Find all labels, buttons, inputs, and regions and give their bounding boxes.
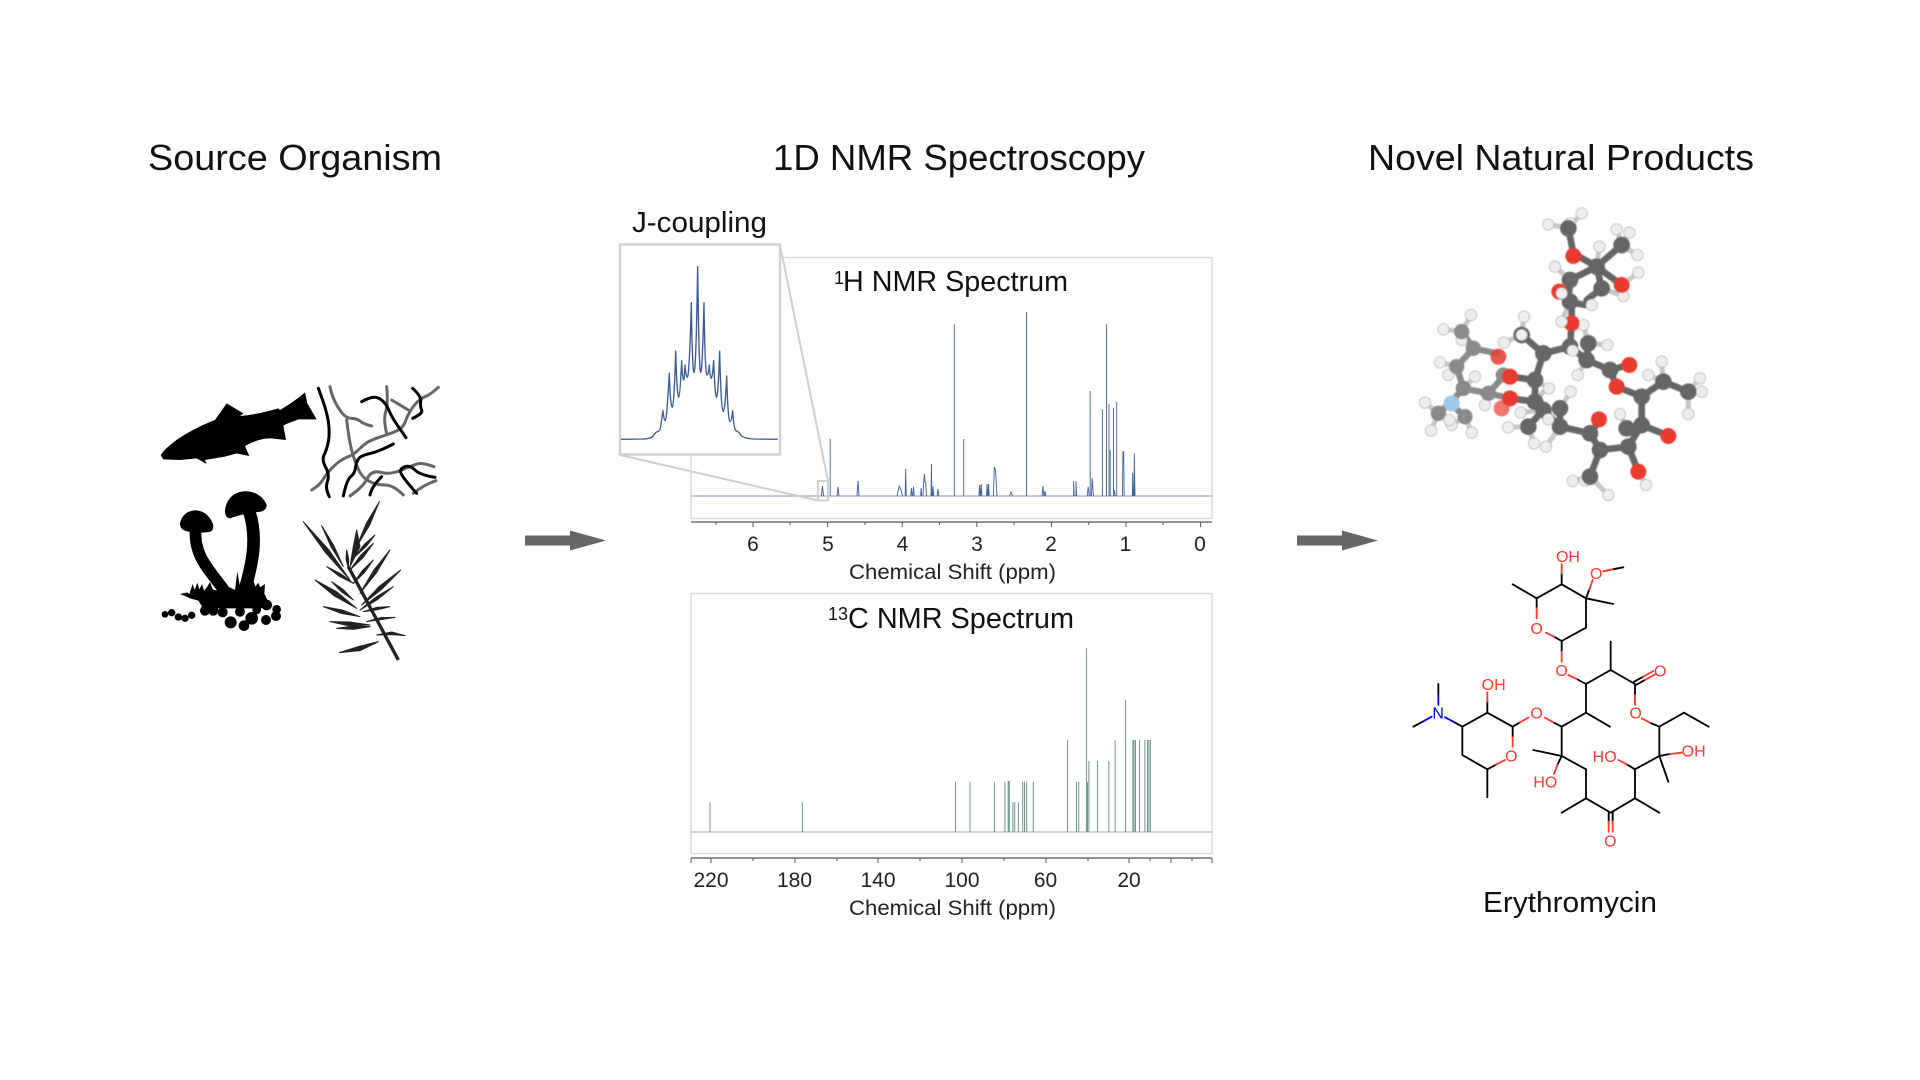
x axis: 1H: 4 (897, 533, 909, 556)
x axis: 13C (691, 858, 1212, 920)
arrow: NMR to products (1297, 530, 1378, 550)
atom labels: OH (1556, 549, 1580, 566)
x axis: 13C: 180 (777, 869, 812, 892)
multiplet curve (621, 267, 778, 439)
x axis: 1H: 1 (1120, 533, 1131, 556)
blue bond ends (1423, 695, 1453, 722)
x axis: 1H: 3 (971, 533, 983, 556)
spectrum label: 1H NMR: 1 (834, 268, 844, 288)
spectrum label: 13C NMR: 13 (828, 604, 848, 624)
icon: hyphae filaments (312, 387, 438, 497)
x axis: 13C: 60 (1034, 869, 1057, 892)
atom labels: O (1604, 834, 1616, 851)
x axis: 1H: 0 (1194, 533, 1206, 556)
atom labels: O (1629, 706, 1642, 723)
connector lines: zoom inset (620, 245, 828, 500)
x axis: 1H: 2 (1045, 533, 1057, 556)
chart: 13C NMR spectrum (691, 594, 1212, 920)
atom labels: OH (1682, 744, 1706, 761)
icon: fish silhouette (161, 392, 317, 464)
icon: mushrooms with moss (162, 491, 281, 631)
atom labels: O (1530, 706, 1543, 723)
carbon peaks (710, 648, 1150, 832)
black bonds (1413, 567, 1709, 822)
proton peaks (821, 312, 1135, 496)
2D structure: erythromycin (1413, 549, 1709, 851)
label: erythromycin: Erythromycin (1483, 887, 1657, 919)
icon: fern frond (303, 502, 405, 660)
x axis: 13C: 100 (944, 869, 980, 892)
3D ball and stick molecule (1419, 208, 1707, 501)
zoom box on peak (818, 481, 828, 500)
atom labels: N (1432, 706, 1444, 723)
atom labels: OH (1482, 677, 1506, 694)
x axis: 13C: 20 (1117, 869, 1141, 892)
inset: J-coupling multiplet (620, 244, 780, 454)
x axis: 1H: 6 (747, 533, 759, 556)
x axis: 13C: 140 (860, 869, 896, 892)
spectrum label: 1H NMR: H NMR Spectrum (843, 266, 1068, 298)
heading: 1D NMR spectroscopy: 1D NMR Spectroscopy (773, 137, 1145, 178)
atom labels: O (1590, 566, 1602, 583)
atom labels: HO (1533, 775, 1557, 792)
atom labels: O (1555, 663, 1568, 680)
red bond ends (1487, 564, 1682, 832)
heading: novel natural products: Novel Natural Products (1368, 137, 1754, 178)
atom labels (1432, 549, 1706, 851)
x axis: 1H (691, 522, 1212, 584)
x axis: 1H: 5 (822, 533, 834, 556)
atom labels: O (1505, 749, 1517, 766)
x axis: 1H: Chemical Shift (ppm) (849, 561, 1056, 584)
label: J-coupling: J-coupling (632, 207, 767, 239)
heading: source organism: Source Organism (148, 137, 442, 178)
chart: 1H NMR spectrum (691, 258, 1212, 584)
panel: source organisms (161, 387, 438, 660)
atom labels: O (1530, 621, 1543, 638)
atom labels: HO (1593, 749, 1617, 766)
x axis: 13C: 220 (693, 869, 729, 892)
spectrum label: 13C NMR: C NMR Spectrum (848, 603, 1074, 635)
x axis: 13C: Chemical Shift (ppm) (849, 897, 1056, 920)
arrow: organism to NMR (525, 530, 606, 550)
atom labels: O (1654, 664, 1666, 681)
